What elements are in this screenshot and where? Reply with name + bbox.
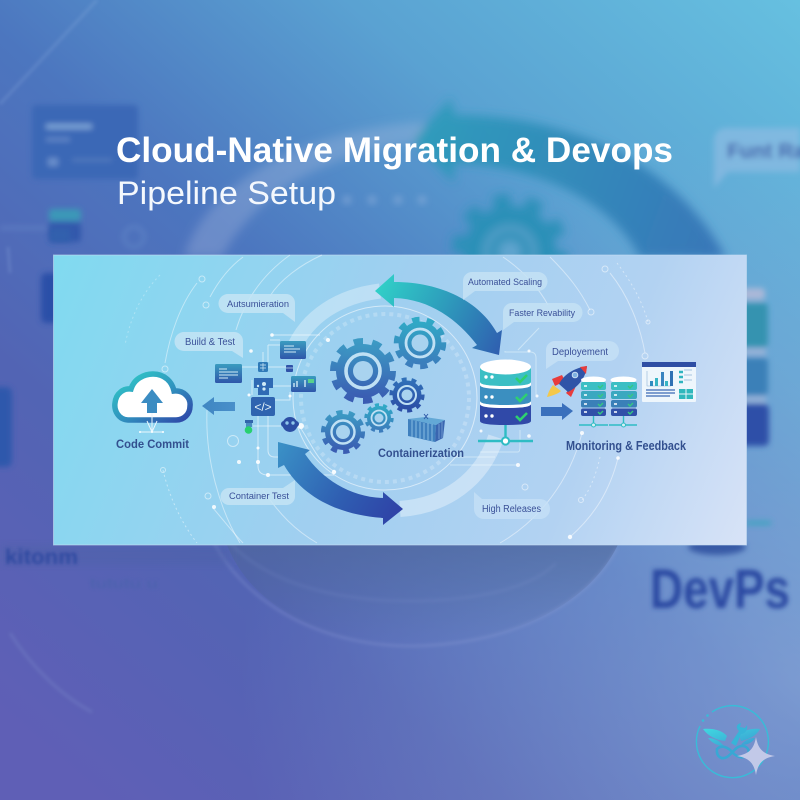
callout: Automated Scaling [463, 272, 548, 300]
light arc lower right [400, 437, 496, 509]
callout: Build & Test [174, 332, 243, 358]
blurred background words: kitonm [5, 546, 78, 569]
icon: small box [286, 365, 293, 372]
icon: small gear [366, 405, 392, 431]
circuit lines centre left [242, 335, 336, 475]
icon: robot head [281, 417, 299, 432]
logo wings [703, 729, 760, 746]
icon: logo badge [696, 706, 775, 778]
callout: Deployement [546, 341, 619, 369]
callout: Container Test [220, 480, 295, 505]
icon: server rack two [609, 376, 637, 427]
blurred small server [0, 209, 144, 247]
blurred right side server [688, 288, 771, 555]
callout: Build & Test: Build & Test [185, 337, 235, 348]
icon: green flask [245, 420, 253, 434]
blurred background card [32, 105, 138, 179]
blurred background gear [458, 200, 562, 304]
callout: Container Test: Container Test [229, 491, 289, 502]
icon: code tile: </> [254, 400, 272, 414]
circuit lines centre right [450, 328, 539, 465]
callout: Automated Scaling: Automated Scaling [468, 277, 542, 288]
icon: code tile [251, 397, 275, 416]
icon: large gear [334, 342, 392, 400]
arrow: top curved arrow [375, 274, 502, 355]
callout: Faster Revability: Faster Revability [509, 308, 575, 319]
icon: top right gear [396, 320, 444, 366]
logo wrench [731, 723, 747, 746]
decorative node dots [160, 266, 650, 502]
icon: card top [280, 341, 306, 359]
label: Code Commit: Code Commit [116, 437, 189, 451]
label: Containerization: Containerization [378, 446, 464, 460]
logo sparkle [737, 737, 775, 775]
decorative circuit arcs [125, 255, 648, 543]
logo infinity [717, 746, 749, 758]
icon: mid right gear [391, 379, 423, 411]
title [116, 131, 673, 211]
blurred background words: tututu u [90, 575, 158, 591]
icon: monitoring dashboard [642, 362, 696, 402]
title line 2: Pipeline Setup [117, 175, 336, 211]
title line 1: Cloud-Native Migration & Devops [116, 131, 673, 170]
blurred background bubble [714, 128, 800, 188]
arrow: left arrow [202, 397, 235, 415]
icon: puzzle module [254, 378, 273, 395]
arrow: right arrow [541, 403, 573, 420]
callout: High Releases [474, 492, 550, 519]
blurred background words [5, 546, 158, 591]
panel: pipeline illustration [54, 255, 746, 545]
blurred background arrow [184, 98, 726, 258]
label: Monitoring & Feedback: Monitoring & Feedback [566, 439, 686, 453]
icon: database server [478, 360, 533, 445]
dotted ring [293, 306, 477, 490]
shaded circle below panel [0, 540, 620, 646]
callout: Autsumieration [218, 294, 295, 322]
icon: server rack one [579, 376, 608, 427]
callout: High Releases: High Releases [482, 504, 541, 515]
icon: small chip [258, 362, 268, 372]
blurred left side blobs [0, 228, 70, 467]
blurred dots [342, 195, 427, 205]
light arc upper left [293, 291, 380, 350]
icon: card left [215, 364, 242, 383]
icon: card chart [291, 376, 316, 392]
arrow: bottom curved arrow [278, 442, 403, 525]
icon: upload cloud [115, 374, 190, 433]
callout: Faster Revability [503, 303, 582, 330]
icon: shipping container [408, 414, 445, 442]
blurred streak lines [0, 0, 97, 712]
icon: lower left gear [323, 412, 363, 452]
callout: Deployement: Deployement [552, 347, 608, 358]
icon: rocket [547, 366, 587, 397]
callout: Autsumieration: Autsumieration [227, 299, 289, 310]
